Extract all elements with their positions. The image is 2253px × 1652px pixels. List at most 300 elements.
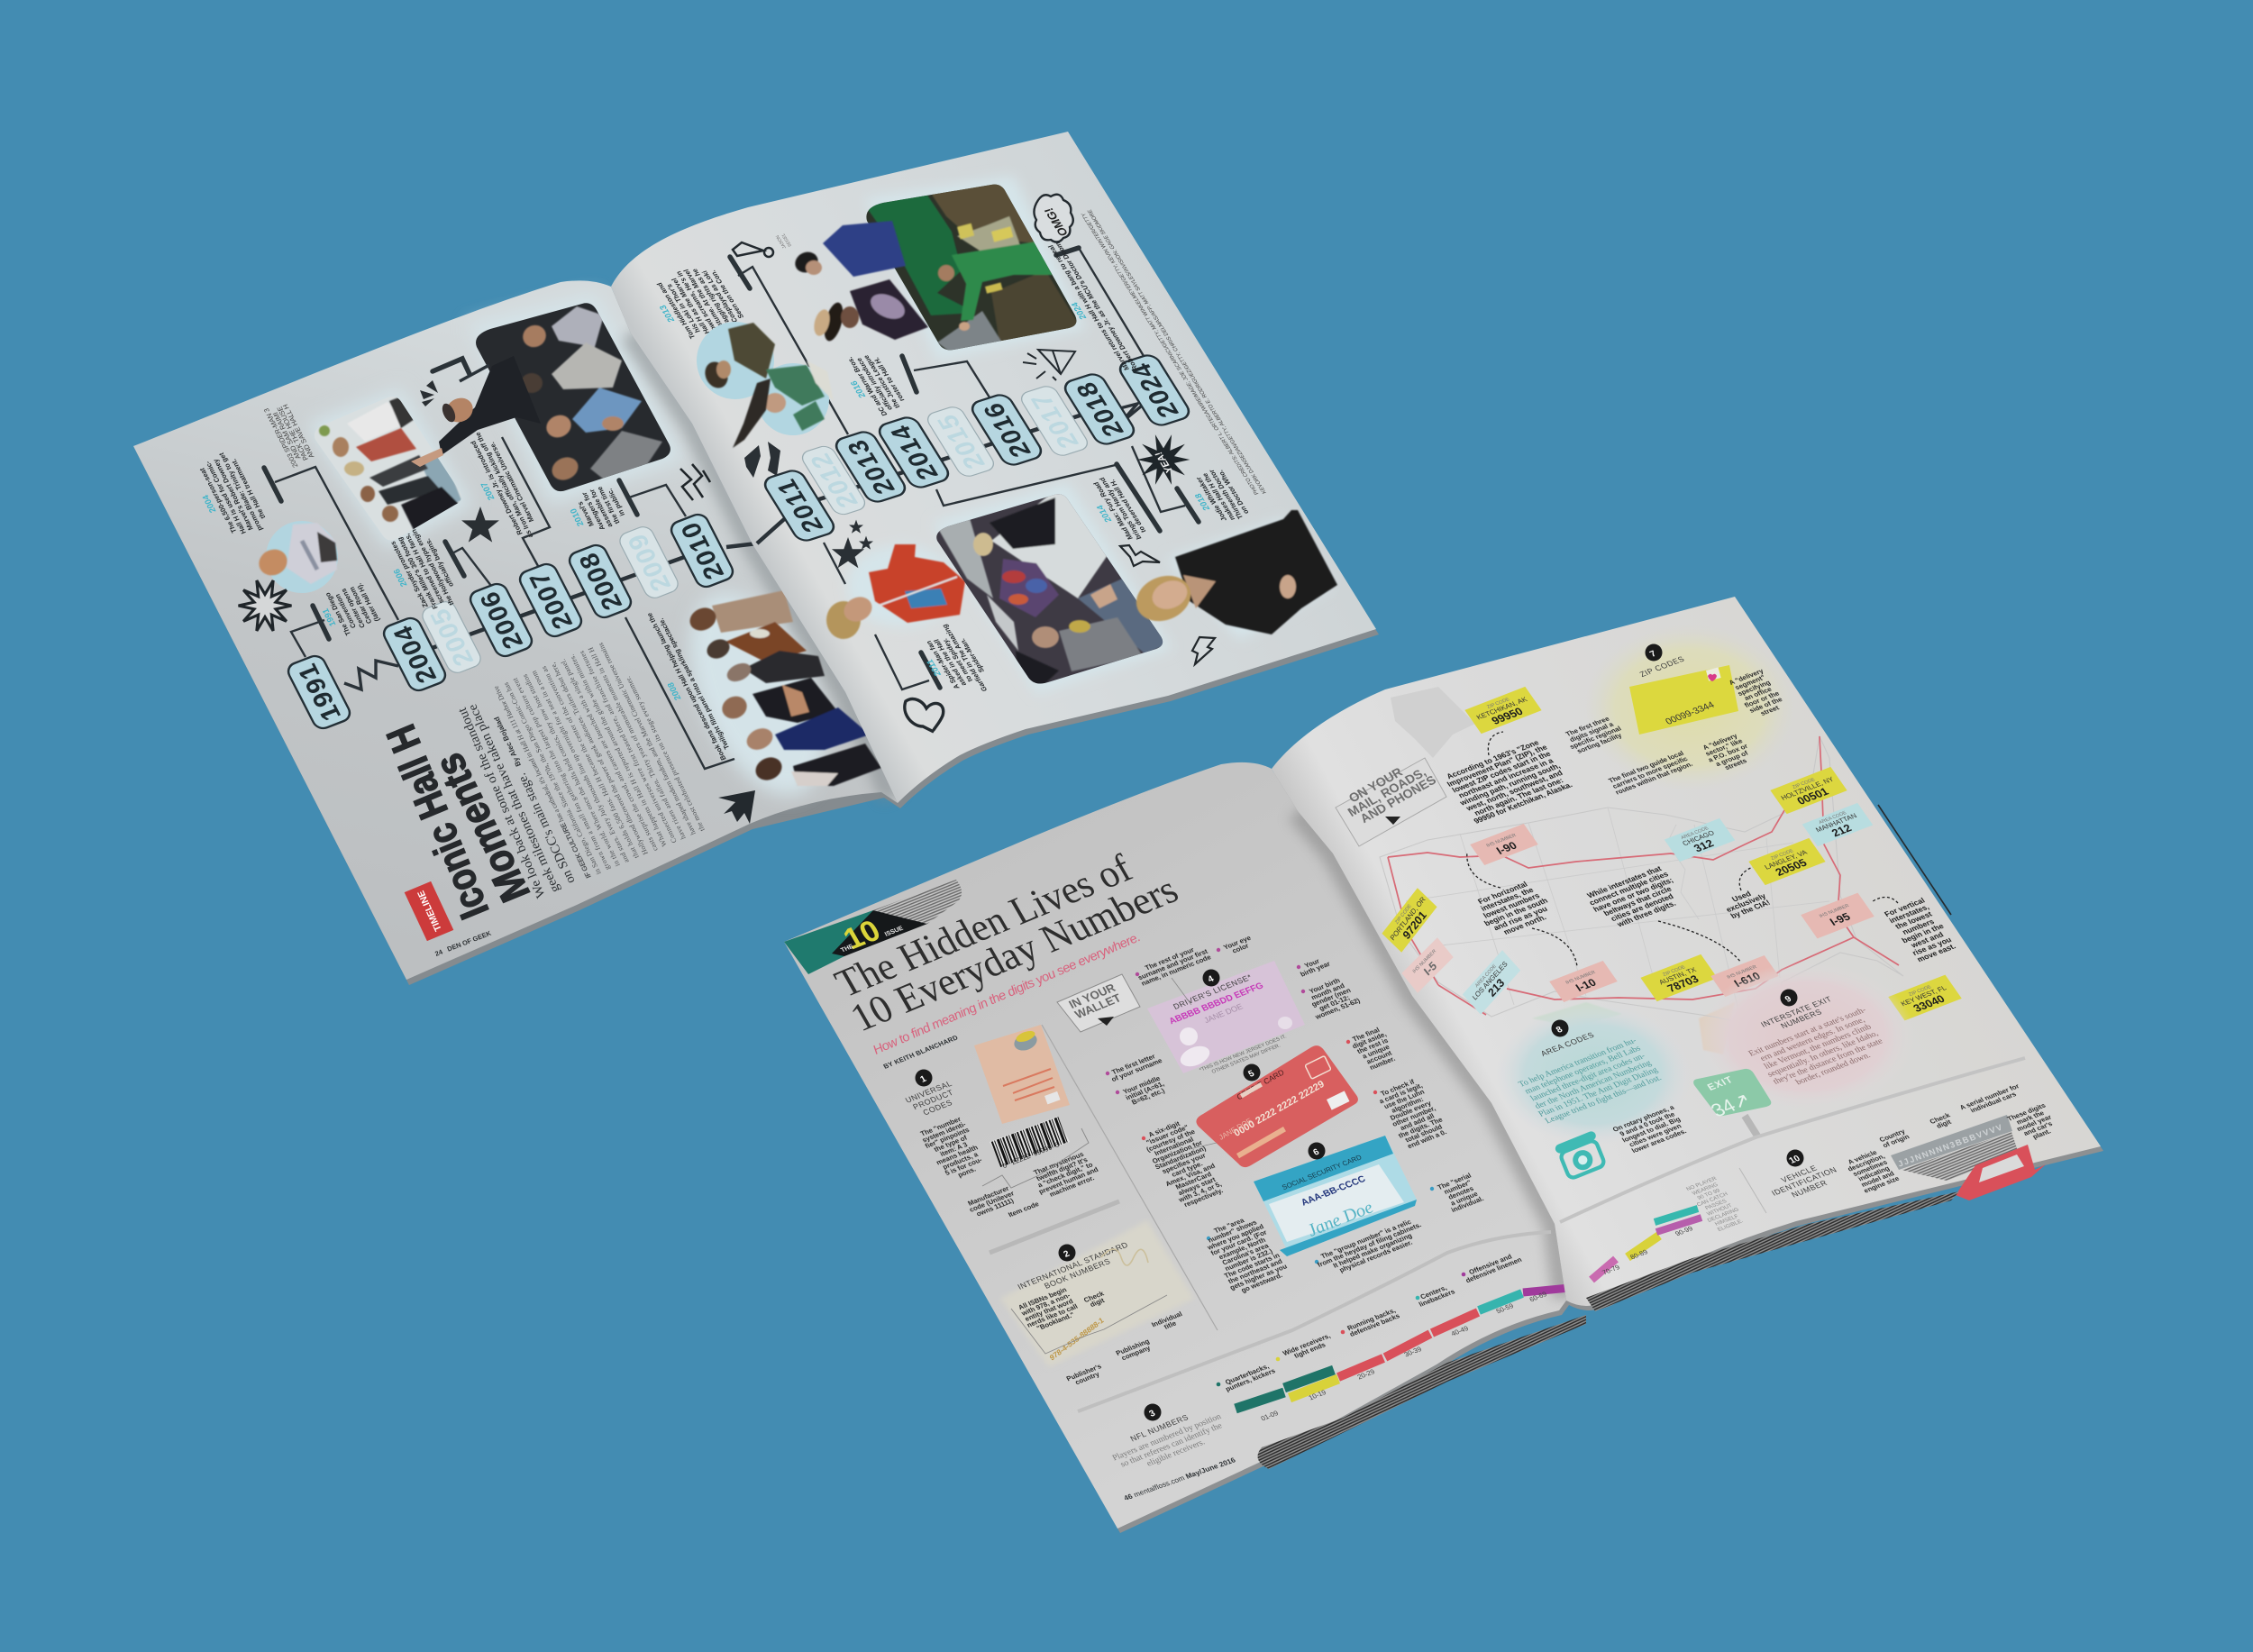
driver's license card: women, 51-62) (1313, 996, 1362, 1021)
body text: Connected universes were first teased there, and franchise fortunes (578, 650, 679, 844)
tag: I-95: I-95 (1828, 910, 1853, 928)
item 10: vehicle identification number: description, (1846, 1153, 1886, 1173)
map notes: interstates, (1887, 902, 1930, 925)
social security card: The "serial (1436, 1172, 1473, 1191)
rotary phone icon (1554, 1130, 1608, 1180)
social security card: go westward. (1239, 1271, 1284, 1294)
callout 2013: Hall H as the Marvel (670, 278, 712, 334)
callout 2018: 2018 (1193, 492, 1212, 511)
map notes: move north. (1501, 913, 1548, 936)
item 10: vehicle identification number: model year (2015, 1113, 2053, 1133)
social security card: the northeast and (1227, 1257, 1284, 1285)
item 3: NFL numbers: 3 (1147, 1409, 1157, 1419)
item 3: NFL numbers: eligible receivers. (1145, 1438, 1207, 1469)
map notes: move east. (1915, 942, 1957, 963)
YEA burst icon: YEA! (1154, 451, 1176, 474)
driver's license card: *THIS IS HOW NEW JERSEY DOES IT. (1199, 1034, 1288, 1073)
OMG cloud icon: OMG! (1041, 206, 1071, 238)
item 9: interstate exit numbers: they're the distance from the state (1771, 1036, 1884, 1086)
callout 2006: the Hollywood hype engine (407, 525, 456, 607)
map notes: winding path, running south, (1457, 762, 1562, 808)
in your wallet label (1057, 974, 1140, 1032)
social security card: AAA-BB-CCCC (1300, 1174, 1368, 1208)
item 2: ISBN: company (1120, 1344, 1153, 1362)
tag: Manhattan area code: AREA CODE (1818, 810, 1848, 826)
callout 2024: Robert Downey Jr. as the MCU's Doctor Doom. (1053, 240, 1140, 371)
item 2: ISBN: All ISBNs begin (1017, 1285, 1069, 1311)
item 1: universal product codes: system identi- (920, 1120, 968, 1144)
item 7: zip codes: a P.O. box or (1706, 742, 1749, 763)
year box 2018 (1061, 371, 1138, 447)
photo credits: PHOTO CREDITS: ALBERT L. ORTEGA/WIREIMAGE; JOE SCARNICI/GETTY; MATT WINKELMEYER/GETTY; KEVIN WINTER/GETTY (1081, 212, 1261, 495)
tag: I-10: I-10 (1573, 976, 1599, 994)
item 10: vehicle identification number: mark the (2015, 1109, 2046, 1126)
tag: Chicago area code: AREA CODE (1680, 826, 1710, 841)
item 10: vehicle identification number (1560, 1058, 2063, 1222)
year box 2024 (1116, 352, 1193, 428)
item 2: ISBN: digit (1089, 1296, 1106, 1309)
title: 10 Everyday Numbers (843, 867, 1185, 1040)
credit card: Standardization) (1154, 1144, 1208, 1171)
tag: Key West zip: 33040 (1911, 993, 1947, 1015)
body text: IF GEEK CULTURE has a cathedral, it's located in Hall H at 111 Harbor Drive (491, 684, 593, 880)
exclamation icon (733, 242, 773, 257)
callout 2010: 2010 (569, 507, 587, 527)
item 7: zip codes: 7 (1648, 649, 1659, 659)
social security card: It helped make organizing (1332, 1231, 1414, 1270)
callout 2013: 2013 (658, 304, 677, 323)
callout 2010: Avengers for (580, 491, 607, 531)
credit card: digit aside, (1351, 1030, 1388, 1050)
callout 1991: Center opens (339, 588, 367, 629)
item 1: universal product codes: That mysterious (1032, 1150, 1085, 1177)
year box 2013: 2013 (842, 436, 901, 497)
year box 2012: 2012 (805, 450, 864, 511)
map notes: northeast and increase in a (1456, 756, 1555, 799)
item 1: universal product codes: 1 (918, 1074, 928, 1085)
NFL position bar chart: Quarterbacks, (1224, 1363, 1271, 1386)
credit card: and add all (1399, 1112, 1436, 1132)
credit card: other number, (1391, 1104, 1437, 1128)
item 9: interstate exit numbers: ern and western edges. In some, (1758, 1016, 1867, 1063)
driver's license card: get 01-12; (1318, 993, 1351, 1012)
credit card (1137, 1025, 1451, 1211)
page block thickness (136, 137, 1379, 985)
star icon (461, 507, 499, 543)
NFL position bar chart: punters, kickers (1224, 1367, 1277, 1393)
social security card: number is 232.) (1223, 1247, 1274, 1273)
credit card: "issuer code" (1145, 1123, 1190, 1146)
tag: Langley zip: ZIP CODE (1770, 848, 1795, 862)
map of Alaska (1391, 687, 1475, 758)
tag: Austin zip: ZIP CODE (1662, 964, 1687, 978)
item 2: ISBN (1000, 1220, 1194, 1389)
timeline connectors (730, 248, 1199, 689)
driver's license card: of your surname (1110, 1056, 1163, 1083)
tag: Manhattan area code: 212 (1829, 822, 1854, 839)
divider (990, 1201, 1119, 1253)
map notes: For horizontal (1476, 880, 1529, 906)
callout 2011: to meet Spidey. (940, 638, 974, 682)
tag: I-95 (1801, 893, 1874, 938)
social security card: physical records easier. (1337, 1238, 1414, 1274)
lightning icon (680, 464, 710, 500)
item 2: ISBN: 978-4-535-88888-1 (1048, 1315, 1105, 1363)
lightning icon (1192, 637, 1215, 664)
right page (611, 132, 1376, 803)
social security card: The "group number" is a relic (1319, 1218, 1413, 1260)
credit card: MasterCard (1174, 1170, 1213, 1191)
driver's license card: The first letter (1110, 1053, 1157, 1076)
item 1: universal product codes: PRODUCT (911, 1088, 955, 1111)
item 7: zip codes: sorting facility (1575, 731, 1624, 755)
credit card: the rest is (1355, 1036, 1390, 1055)
year box 2016: 2016 (978, 399, 1037, 461)
item 10: vehicle identification number: Country (1877, 1127, 1907, 1144)
tag: Ketchikan zip: 99950 (1489, 706, 1526, 727)
NFL position bar chart: Offensive and (1467, 1253, 1514, 1276)
year box 2017 (1017, 384, 1091, 458)
item 10: vehicle identification number: sometimes (1851, 1158, 1889, 1178)
man with microphone (411, 356, 541, 467)
photo credit note: PACK THE HOUSE (275, 406, 310, 461)
credit card: use the Luhn (1382, 1088, 1426, 1110)
tag: I-10 (1549, 961, 1618, 1002)
item 8: area codes (1496, 1004, 1692, 1180)
tag: I-5: IHS NUMBER (1412, 949, 1437, 975)
year box 2011: 2011 (771, 475, 830, 535)
callout 2008: 2008 (666, 681, 684, 701)
NFL chart continuation: HIMSELF (1714, 1213, 1740, 1228)
item 2: ISBN: "Bookland." (1035, 1310, 1076, 1332)
item 2: ISBN: Individual (1150, 1310, 1183, 1328)
callout 2014: brings Tom Hardy and (1098, 476, 1144, 540)
heart icon (905, 699, 944, 732)
callout 1991: Convention (333, 593, 358, 629)
photo: man in circle (255, 521, 338, 593)
tag: Key West zip (1888, 975, 1962, 1020)
item 1: universal product codes: UNIVERSAL (904, 1079, 953, 1105)
item 8: area codes: Plan in 1951. The Anti Digit Dialing (1537, 1065, 1660, 1119)
title: Iconic Hall H (377, 718, 497, 926)
in your wallet label: IN YOUR (1066, 981, 1118, 1011)
callout 2016: DC and Warner Bros. (845, 356, 889, 416)
map notes: begin in the (1900, 922, 1946, 945)
body text: have shaped modern fandom, and the Marvel Cinematic Universe remains (597, 642, 698, 836)
credit card: The final (1351, 1026, 1381, 1043)
diamond icon (1023, 350, 1075, 380)
credit card: CREDIT CARD (1236, 1067, 1285, 1101)
subtitle: We look back at some of the standout (455, 706, 549, 900)
item 9: interstate exit numbers: Exit numbers start at a state's south- (1747, 1006, 1868, 1058)
year box 2007 (516, 561, 585, 639)
driver's license card: color (1231, 942, 1250, 954)
tag: I-90 (1470, 824, 1538, 865)
item 3: NFL numbers: NFL NUMBERS (1128, 1412, 1190, 1443)
NFL chart continuation: ELIGIBLE. (1717, 1218, 1745, 1233)
driver's license card: month and (1309, 981, 1346, 1001)
callout 2010: in public. (606, 488, 626, 517)
halftone footer strip (1586, 1191, 1959, 1311)
item 7: zip codes: digits signal a (1568, 720, 1616, 744)
callout 2013: costume. At the Marvel (681, 269, 729, 334)
year box 2018: 2018 (1071, 379, 1130, 440)
body text: grown from a small fan gathering into the largest pop culture event (510, 676, 612, 872)
callout 2004: Marvel's Robert Downey (211, 457, 255, 532)
tag: Holtzville zip (1770, 767, 1847, 814)
tag: I-5 (1401, 937, 1454, 993)
item 9: interstate exit numbers: sequentially. In others, like Idaho, (1765, 1029, 1880, 1079)
social security card: Jane Doe (1303, 1198, 1377, 1240)
photo: man in red jacket (826, 544, 965, 639)
driver's license card: 4 (1206, 974, 1216, 985)
NFL chart continuation: 80-89 (1628, 1248, 1649, 1261)
year box 2016 (968, 392, 1045, 468)
social security card: example, North (1218, 1236, 1267, 1261)
item 3: NFL numbers: Players are numbered by position (1110, 1411, 1223, 1463)
year box 2010 (668, 512, 736, 589)
exit sign: 34↗ (1707, 1089, 1756, 1121)
item 7: zip codes: a group of (1714, 749, 1750, 768)
tag: Manhattan area code (1802, 803, 1873, 846)
driver's license card: OTHER STATES MAY DIFFER. (1211, 1043, 1282, 1075)
body text: in San Diego, California. Since the 1970s, the San Diego Comic-Con has (502, 681, 603, 876)
NFL chart continuation: 90 TO 99 (1696, 1188, 1722, 1201)
title (377, 718, 539, 926)
emphasis lines icon (420, 380, 438, 406)
map notes: exclusively (1724, 891, 1768, 914)
credit card: account (1365, 1049, 1393, 1065)
year box 2004: 2004 (388, 621, 442, 687)
double lightning icon (744, 442, 780, 478)
item 9: interstate exit numbers: 9 (1783, 994, 1794, 1004)
item 7: zip codes: 00099-3344 (1664, 700, 1717, 727)
caption: name labels: JASON (775, 234, 788, 249)
photo halos (847, 176, 1332, 694)
page block thickness (787, 601, 2103, 1533)
item 1: universal product codes: products, a (941, 1150, 980, 1171)
NFL position bar chart: linebackers (1418, 1288, 1456, 1309)
driver's license card: B=62, etc.) (1130, 1086, 1166, 1106)
item 2: ISBN: Publishing (1115, 1337, 1151, 1357)
item 2: ISBN: Check (1082, 1289, 1106, 1304)
photo: cast in a row (686, 590, 881, 786)
item 10: vehicle identification number: digit (1935, 1118, 1953, 1130)
item 2: ISBN: nerds like to call (1026, 1302, 1079, 1329)
year box 2013 (832, 429, 909, 505)
map notes: have one or two digits; (1592, 876, 1675, 914)
body text: and stars. Every July thousands line up overnight for a seat in a room (530, 670, 631, 864)
credit card: Double every (1389, 1099, 1433, 1122)
map notes: lowest numbers (1482, 891, 1542, 920)
body text: in the world. Where once the halls held comics, they now host studios (521, 673, 622, 868)
item 2: ISBN: 2 (1062, 1249, 1072, 1260)
driver's license card: Your birth (1308, 976, 1342, 995)
item 7: zip codes: carriers to more specific (1610, 755, 1689, 790)
callout 2013: Seen on the Con. (708, 269, 745, 319)
map notes: cities are denoted (1609, 891, 1675, 923)
item 8: area codes: League tried to fight this—and lost. (1543, 1073, 1664, 1126)
driver's license card: birth year (1299, 960, 1332, 978)
year box 2017: 2017 (1026, 390, 1085, 452)
callout 2010: assemble for (588, 488, 615, 528)
tag: Portland zip: PORTLAND, OR (1389, 895, 1428, 942)
map notes: interstates, the (1479, 885, 1536, 913)
item 8: area codes: To help America transition from hu- (1517, 1036, 1638, 1089)
item 10: vehicle identification number: plant. (2031, 1127, 2052, 1141)
in your wallet label: WALLET (1072, 991, 1124, 1021)
item 9: interstate exit numbers: NUMBERS (1779, 1008, 1824, 1030)
item 1: universal product codes: fier" pinpoints (924, 1126, 971, 1150)
credit card: total should (1404, 1123, 1444, 1144)
tag: I-90: IHS NUMBER (1485, 833, 1518, 849)
magazine: Hidden Lives of Numbers spread (784, 597, 2103, 1533)
item 8: area codes: On rotary phones, a (1611, 1103, 1676, 1134)
tag: Key West zip: ZIP CODE (1908, 984, 1933, 998)
item 7: zip codes: A "delivery (1728, 667, 1765, 687)
photo: two actors in circles (697, 322, 834, 448)
map notes: For vertical (1883, 896, 1927, 918)
callout 2010: the first time (596, 486, 622, 525)
callout 2008: Book fans descend upon Hall H helping launch the (645, 612, 728, 762)
callout 2004: The 6,500-person-seat (197, 467, 238, 534)
tag: Langley zip: LANGLEY, VA (1763, 848, 1810, 871)
item 7: zip codes (1560, 625, 1796, 796)
map notes: beltways that circle (1601, 884, 1674, 917)
tag: Portland zip: ZIP CODE (1394, 903, 1413, 926)
callout 2013: Tom Hiddleston and (655, 281, 698, 340)
item 10: vehicle identification number: of origin (1881, 1133, 1911, 1149)
item 1: universal product codes: a "check digit," to (1036, 1161, 1095, 1189)
NFL position bar chart: defensive backs (1348, 1311, 1401, 1338)
tag: Austin zip: AUSTIN, TX (1657, 965, 1699, 986)
item 1: universal product codes: Manufacturer (966, 1184, 1010, 1208)
driver's license card: ABBBB BBBDD EEFFG (1167, 981, 1265, 1027)
credit card: number. (1368, 1054, 1397, 1072)
footer: 46 mentalfloss.com May/June 2016 (1123, 1456, 1237, 1502)
year box 2010: 2010 (675, 517, 730, 583)
year box 2011 (761, 468, 838, 543)
tag: I-10: IHS NUMBER (1564, 970, 1597, 986)
driver's license card: Your middle (1121, 1074, 1162, 1096)
caption: name labels: SEGEL (780, 233, 793, 247)
credit card: 5 (1246, 1069, 1256, 1080)
year box 2024: 2024 (1126, 360, 1185, 421)
YEA burst icon (1137, 434, 1190, 485)
item 1: universal product codes: CODES (921, 1098, 954, 1117)
social security card: a unique (1449, 1190, 1479, 1207)
callout 2006: 2006 (392, 568, 410, 588)
lightning icon (1120, 545, 1160, 566)
credit card: JANE DOE (1218, 1117, 1253, 1142)
NFL position bar chart: 30-39 (1403, 1345, 1423, 1358)
item 2: ISBN: country (1073, 1370, 1101, 1386)
NFL position bar chart: 20-29 (1356, 1367, 1376, 1381)
folio: 24 DEN OF GEEK (433, 929, 493, 958)
credit card: the digits. The (1397, 1116, 1444, 1140)
map notes: connect multiple cities (1587, 870, 1670, 907)
item 1: universal product codes: twelfth digit? It's (1035, 1155, 1089, 1182)
item 2: ISBN: title (1163, 1319, 1178, 1331)
photo credit note: 2003 SPIDER-MAN 3 (262, 407, 300, 469)
social security card: individual. (1450, 1194, 1485, 1214)
callout 2018: makes Hall H the (1200, 472, 1237, 521)
body text: the most celebrated presence on its stage every summer. (624, 675, 707, 833)
callout 2016: roster to Hall H. (871, 356, 907, 402)
callout 2013: Cosplayed as Loki (700, 269, 740, 324)
NFL position bar chart: Wide receivers, (1282, 1332, 1332, 1357)
callout 2007: Marvel Cinematic Universe. (488, 441, 535, 523)
item 10: vehicle identification number: NUMBER (1790, 1178, 1829, 1199)
issue banner: 10 (838, 914, 887, 956)
barcode: 0 22222 99999 5 (1000, 1141, 1061, 1170)
year box 2014: 2014 (885, 422, 944, 483)
callout 2013: his Loki in Thor's (664, 283, 702, 333)
callout 2007: Robert Downey Jr. is introduced (469, 440, 524, 536)
left page (784, 762, 1588, 1529)
callout 2018: Thirteenth Doctor (1207, 469, 1245, 520)
driver's license card: DRIVER'S LICENSE* (1172, 972, 1254, 1011)
NFL chart continuation: DECLARING (1706, 1207, 1740, 1224)
NFL chart continuation: 90-99 (1674, 1225, 1694, 1237)
issue banner: THE (840, 944, 855, 954)
NFL position bar chart: 60-69 (1528, 1290, 1548, 1303)
callout 2018: Jodie Whittaker (1194, 476, 1228, 522)
body text: casts surprise the crowd, and careers are launched with a single panel. (559, 658, 660, 853)
credit card: Amex, Visa, and (1164, 1162, 1217, 1188)
callout 2016: 2016 (849, 379, 868, 398)
section label: mail, roads, phones (1336, 753, 1446, 846)
timeline connectors (264, 437, 757, 769)
callout 2024: Marvel returns to Hall H with a bang to reveal (1046, 244, 1131, 371)
item 1: universal product codes: machine error. (1048, 1174, 1096, 1199)
item 10: vehicle identification number: 10 (1787, 1154, 1802, 1165)
item 1: universal product codes (904, 1025, 1103, 1219)
map notes: numbers (1901, 917, 1936, 936)
subtitle: geek milestones that have taken place (465, 702, 563, 895)
NFL position bar chart: 10-19 (1308, 1388, 1327, 1401)
callout 1991: Cedar Room (347, 586, 374, 625)
item 7: zip codes: The final two guide local (1607, 749, 1685, 785)
NFL chart continuation: WITHOUT (1706, 1202, 1734, 1218)
item 8: area codes: longest to dial. Big (1620, 1115, 1683, 1144)
soft photo halos (306, 293, 852, 816)
callout 2014: to deserved Hall H. (1108, 479, 1148, 534)
callout 2004: Hall H is used for Comic- (203, 460, 248, 535)
timeline badge: TIMELINE (416, 889, 444, 933)
map notes: north again. The last one: (1473, 776, 1565, 817)
item 8: area codes: der the North American Numbering (1533, 1058, 1654, 1111)
tag: Los Angeles area code (1463, 950, 1520, 1015)
year box 2005: 2005 (424, 604, 479, 670)
callout 2011: asked in the Hall (932, 638, 968, 687)
callout 2008: Twilight film panel into a sparkling spectacle. (657, 617, 731, 751)
item 2: ISBN: BOOK NUMBERS (1043, 1256, 1112, 1291)
map notes: According to 1963's "Zone (1445, 738, 1541, 780)
item 1: universal product codes: means health (935, 1144, 980, 1166)
item 7: zip codes: The first three (1564, 715, 1611, 738)
credit card: (courtesy of the (1145, 1127, 1197, 1154)
NFL position bar chart: Running backs, (1345, 1307, 1397, 1332)
tag: Los Angeles area code: 213 (1486, 976, 1507, 999)
item 10: vehicle identification number: individual cars (1969, 1091, 2018, 1114)
social security card (1199, 1136, 1486, 1298)
credit card: Organization for (1151, 1138, 1204, 1165)
section label: mail, roads, phones: MAIL, ROADS, (1345, 764, 1428, 819)
photo: fans in crowd (936, 494, 1163, 683)
photo credit note: AND SAVE HALL H (281, 403, 315, 459)
subtitle: How to find meaning in the digits you see everywhere. (871, 930, 1144, 1057)
